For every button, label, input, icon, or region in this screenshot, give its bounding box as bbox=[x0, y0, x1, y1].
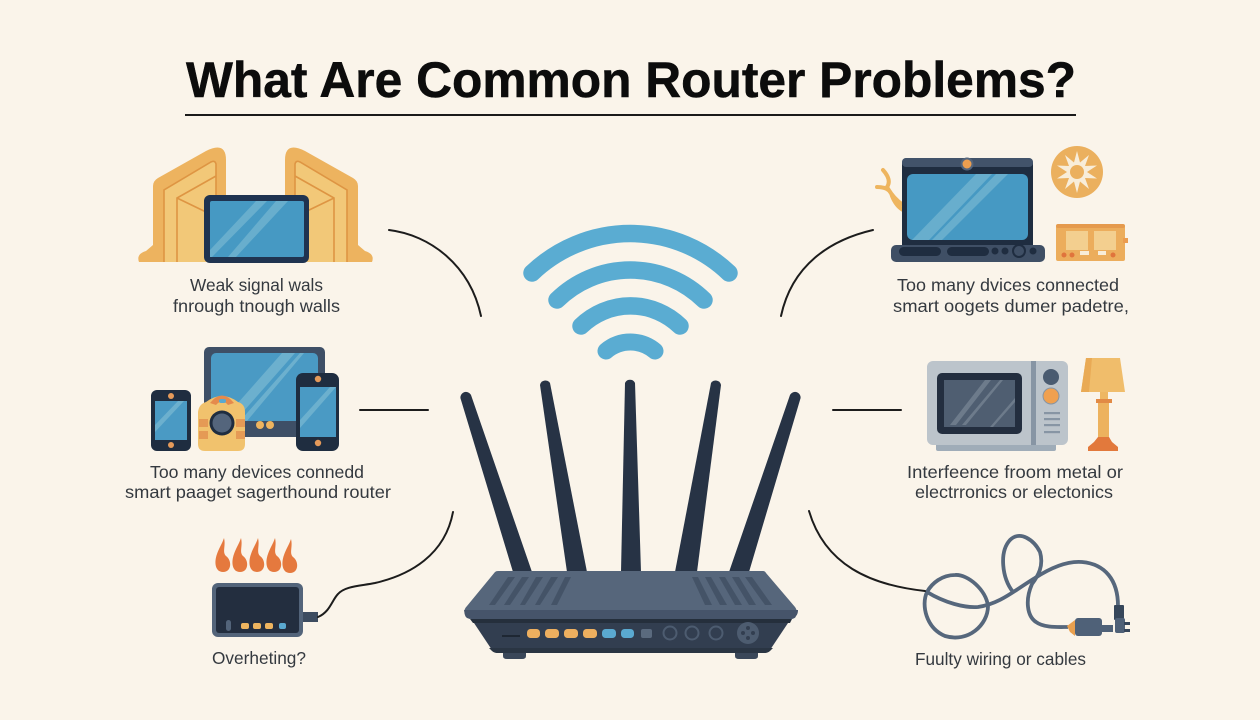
icon: sun bbox=[1051, 146, 1103, 198]
status lights and ports bbox=[502, 622, 759, 644]
antennas bbox=[460, 380, 801, 572]
caption bbox=[893, 275, 1129, 316]
icon: laptop bbox=[877, 158, 1045, 262]
caption: Overheting? bbox=[212, 648, 306, 668]
icon: hot router with flames bbox=[212, 538, 318, 637]
caption: Fuulty wiring or cables bbox=[915, 649, 1086, 669]
icon: orange circuit box bbox=[1056, 224, 1128, 261]
router feet bbox=[503, 652, 758, 659]
connector lines bbox=[318, 230, 925, 617]
panel: faulty wiring bbox=[915, 536, 1130, 669]
caption: smart oogets dumer padetre, bbox=[893, 296, 1129, 316]
caption: Too many devices connedd bbox=[150, 462, 364, 482]
caption: Weak signal wals bbox=[190, 275, 323, 295]
router body bbox=[464, 571, 798, 653]
icon: microwave bbox=[927, 361, 1068, 451]
router bbox=[460, 380, 801, 659]
caption: fnrough tnough walls bbox=[173, 296, 340, 316]
vents bbox=[489, 577, 772, 605]
caption bbox=[125, 462, 391, 502]
panel: weak signal through walls bbox=[138, 148, 373, 316]
icon: monitor, phones and gadget bbox=[151, 347, 339, 451]
panel: too many devices connected (right) bbox=[877, 146, 1129, 316]
icon: walls and tablet bbox=[138, 148, 373, 263]
panel: interference bbox=[907, 358, 1125, 502]
caption: Too many dvices connected bbox=[897, 275, 1119, 295]
icon: wifi signal bbox=[532, 234, 729, 351]
icon: lamp bbox=[1081, 358, 1125, 451]
caption bbox=[907, 462, 1123, 502]
icon: tangled cable and plug bbox=[925, 536, 1130, 638]
caption bbox=[173, 275, 340, 316]
caption: electrronics or electonics bbox=[915, 482, 1113, 502]
caption: Interfeence froom metal or bbox=[907, 462, 1123, 482]
caption: smart paaget sagerthound router bbox=[125, 482, 391, 502]
panel: too many devices bbox=[125, 347, 391, 502]
title: What Are Common Router Problems? bbox=[186, 52, 1076, 108]
panel: overheating bbox=[212, 538, 318, 668]
